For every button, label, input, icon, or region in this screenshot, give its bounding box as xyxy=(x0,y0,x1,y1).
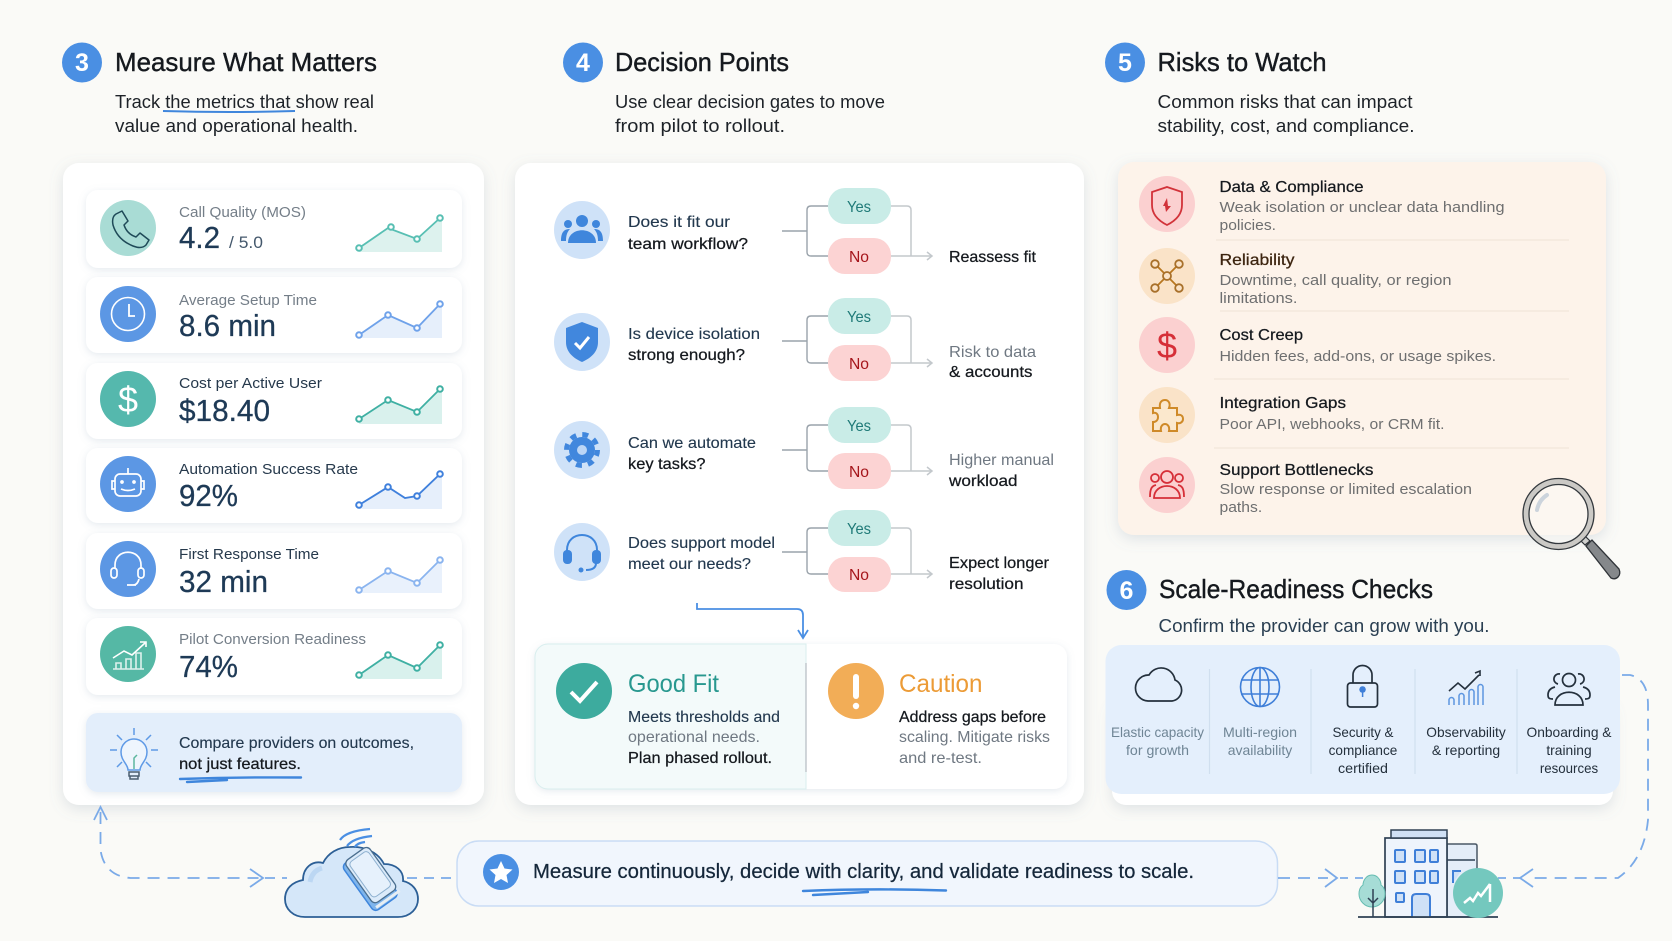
decision row: device isolation: & accounts xyxy=(949,364,1032,381)
panel: risks xyxy=(1118,162,1620,579)
section 3 heading: value and operational health. xyxy=(115,116,358,136)
risk: support bottlenecks xyxy=(1139,457,1472,516)
outcome: caution: Address gaps before xyxy=(899,709,1046,726)
risk: reliability: Downtime, call quality, or region xyxy=(1220,272,1452,289)
section 5 heading: 5 xyxy=(1118,49,1132,77)
section 6 heading: Scale-Readiness Checks xyxy=(1159,574,1433,604)
metric card: automation: 92% xyxy=(179,478,238,513)
decision row: support model xyxy=(554,510,1050,593)
arrow: left dashed flow xyxy=(94,807,457,887)
takeaway banner xyxy=(457,841,1278,906)
risk: cost creep: Cost Creep xyxy=(1220,327,1303,344)
panel: decision points xyxy=(515,163,1084,805)
decision row: automate tasks: workload xyxy=(948,473,1018,490)
decision row: automate tasks: No xyxy=(849,464,869,481)
section 4 heading: Use clear decision gates to move xyxy=(615,92,885,112)
decision row: automate tasks: key tasks? xyxy=(628,456,706,473)
risk: data and compliance xyxy=(1139,176,1504,234)
section 6 heading: Confirm the provider can grow with you. xyxy=(1158,616,1490,636)
check: multi-region: Multi-region xyxy=(1223,724,1297,740)
risk: data and compliance: policies. xyxy=(1220,217,1276,234)
metric card: call quality: Call Quality (MOS) xyxy=(179,204,306,221)
decision row: team workflow: team workflow? xyxy=(628,236,748,253)
metric card: first response: 32 min xyxy=(179,564,268,599)
arrow: right dashed flow xyxy=(1278,675,1648,887)
decision row: automate tasks xyxy=(554,407,1054,490)
check: security xyxy=(1329,666,1398,776)
check: observability xyxy=(1426,671,1506,758)
outcome: good fit: Plan phased rollout. xyxy=(628,750,772,767)
risk: reliability xyxy=(1139,248,1452,307)
decision row: device isolation: No xyxy=(849,356,869,373)
metric card: call quality: / 5.0 xyxy=(229,233,263,252)
section 5 heading xyxy=(1105,42,1414,136)
outcome: good fit: Good Fit xyxy=(628,670,719,698)
decision row: team workflow xyxy=(554,188,1037,274)
decision row: team workflow: Does it fit our xyxy=(628,214,731,231)
outcome: good fit xyxy=(556,663,780,767)
metric card: pilot conversion: 74% xyxy=(179,649,238,684)
section 5 heading: stability, cost, and compliance. xyxy=(1158,116,1414,136)
check: multi-region: availability xyxy=(1228,742,1292,758)
risk: cost creep: Hidden fees, add-ons, or usage spikes. xyxy=(1220,348,1496,365)
decision row: team workflow: No xyxy=(849,249,869,266)
check: elastic capacity: Elastic capacity xyxy=(1111,724,1204,740)
section 3 heading: Track the metrics that show real xyxy=(115,92,374,112)
outcome: good fit: operational needs. xyxy=(628,729,760,746)
section 5 heading: Risks to Watch xyxy=(1158,47,1326,77)
risk: cost creep: $ xyxy=(1157,325,1177,366)
metric card: pilot conversion xyxy=(86,618,462,695)
risk: reliability: Reliability xyxy=(1220,252,1294,269)
metric card: setup time: 8.6 min xyxy=(179,308,276,343)
metric card: pilot conversion: Pilot Conversion Readiness xyxy=(179,631,366,648)
check: security: compliance xyxy=(1329,742,1398,758)
check: onboarding: resources xyxy=(1540,760,1598,776)
icon: office building with growth badge xyxy=(1358,830,1503,918)
icon: magnifying glass xyxy=(1523,478,1620,579)
outcome: caution: Caution xyxy=(899,670,982,698)
risk: reliability: limitations. xyxy=(1220,290,1298,307)
decision row: support model: No xyxy=(849,567,869,584)
risk: data and compliance: Weak isolation or unclear data handling xyxy=(1220,199,1504,216)
panel: metrics xyxy=(63,163,484,805)
metric card: first response: First Response Time xyxy=(179,546,319,563)
section 5 heading: Common risks that can impact xyxy=(1158,92,1412,112)
metric card: call quality: 4.2 xyxy=(179,220,220,255)
risk: support bottlenecks: Slow response or limited escalation xyxy=(1220,481,1472,498)
risk: support bottlenecks: paths. xyxy=(1220,499,1262,516)
outcome: caution xyxy=(828,663,1050,767)
risk: cost creep xyxy=(1139,317,1496,373)
decision row: device isolation: strong enough? xyxy=(628,347,745,364)
decision row: team workflow: Reassess fit xyxy=(949,249,1037,266)
outcome: caution: scaling. Mitigate risks xyxy=(899,729,1050,746)
check: onboarding xyxy=(1526,674,1612,776)
check: elastic capacity xyxy=(1111,668,1204,758)
decision row: support model: Expect longer xyxy=(949,555,1050,572)
risk: data and compliance: Data & Compliance xyxy=(1220,179,1364,196)
decision row: automate tasks: Can we automate xyxy=(628,435,756,452)
metric card: cost per user: Cost per Active User xyxy=(179,375,322,392)
metric card: first response xyxy=(86,533,462,609)
check: multi-region xyxy=(1223,668,1297,758)
check: security: certified xyxy=(1338,760,1388,776)
section 3 heading xyxy=(62,42,377,136)
section 4 heading: Decision Points xyxy=(615,47,789,77)
outcome: caution: and re-test. xyxy=(899,750,982,767)
decision row: team workflow: Yes xyxy=(847,199,871,216)
section 4 heading: 4 xyxy=(576,49,590,77)
decision row: support model: meet our needs? xyxy=(628,556,751,573)
check: security: Security & xyxy=(1332,724,1394,740)
section 6 heading xyxy=(1106,570,1490,636)
decision row: device isolation: Risk to data xyxy=(949,344,1036,361)
metric card: call quality xyxy=(86,190,462,268)
callout: compare providers: Compare providers on outcomes, xyxy=(179,735,414,752)
decision row: support model: Does support model xyxy=(628,535,775,552)
decision row: support model: Yes xyxy=(847,521,871,538)
check: elastic capacity: for growth xyxy=(1126,742,1189,758)
decision row: automate tasks: Yes xyxy=(847,418,871,435)
outcomes panel xyxy=(535,644,1067,789)
decision row: automate tasks: Higher manual xyxy=(949,452,1054,469)
metric card: automation xyxy=(86,448,462,523)
callout: compare providers: not just features. xyxy=(179,756,301,773)
metric card: automation: Automation Success Rate xyxy=(179,461,358,478)
decision row: device isolation: Is device isolation xyxy=(628,326,760,343)
metric card: cost per user xyxy=(86,363,462,439)
risk: integration gaps: Poor API, webhooks, or CRM fit. xyxy=(1220,416,1444,433)
section 4 heading xyxy=(563,42,885,136)
section 4 heading: from pilot to rollout. xyxy=(615,116,785,136)
decision row: device isolation xyxy=(554,298,1036,381)
risk: integration gaps: Integration Gaps xyxy=(1220,395,1346,412)
decision row: device isolation: Yes xyxy=(847,309,871,326)
check: onboarding: Onboarding & xyxy=(1526,724,1612,740)
section 3 heading: Measure What Matters xyxy=(115,47,377,77)
check: observability: & reporting xyxy=(1432,742,1500,758)
metric card: setup time xyxy=(86,277,462,353)
metric card: cost per user: $ xyxy=(118,379,138,420)
risk: support bottlenecks: Support Bottlenecks xyxy=(1220,462,1374,479)
panel: scale-readiness checks xyxy=(1106,645,1620,805)
check: observability: Observability xyxy=(1426,724,1506,740)
outcome: good fit: Meets thresholds and xyxy=(628,709,780,726)
section 3 heading: 3 xyxy=(75,49,89,77)
section 6 heading: 6 xyxy=(1120,577,1133,605)
arrow: to outcomes xyxy=(697,603,808,638)
icon: cloud with phone xyxy=(285,829,418,917)
callout: compare providers xyxy=(86,713,462,792)
decision row: support model: resolution xyxy=(949,576,1024,593)
check: onboarding: training xyxy=(1546,742,1592,758)
metric card: cost per user: $18.40 xyxy=(179,393,270,428)
metric card: setup time: Average Setup Time xyxy=(179,292,317,309)
risk: integration gaps xyxy=(1139,387,1444,443)
takeaway banner: Measure continuously, decide with clarity, and validate readiness to scale. xyxy=(533,861,1194,883)
